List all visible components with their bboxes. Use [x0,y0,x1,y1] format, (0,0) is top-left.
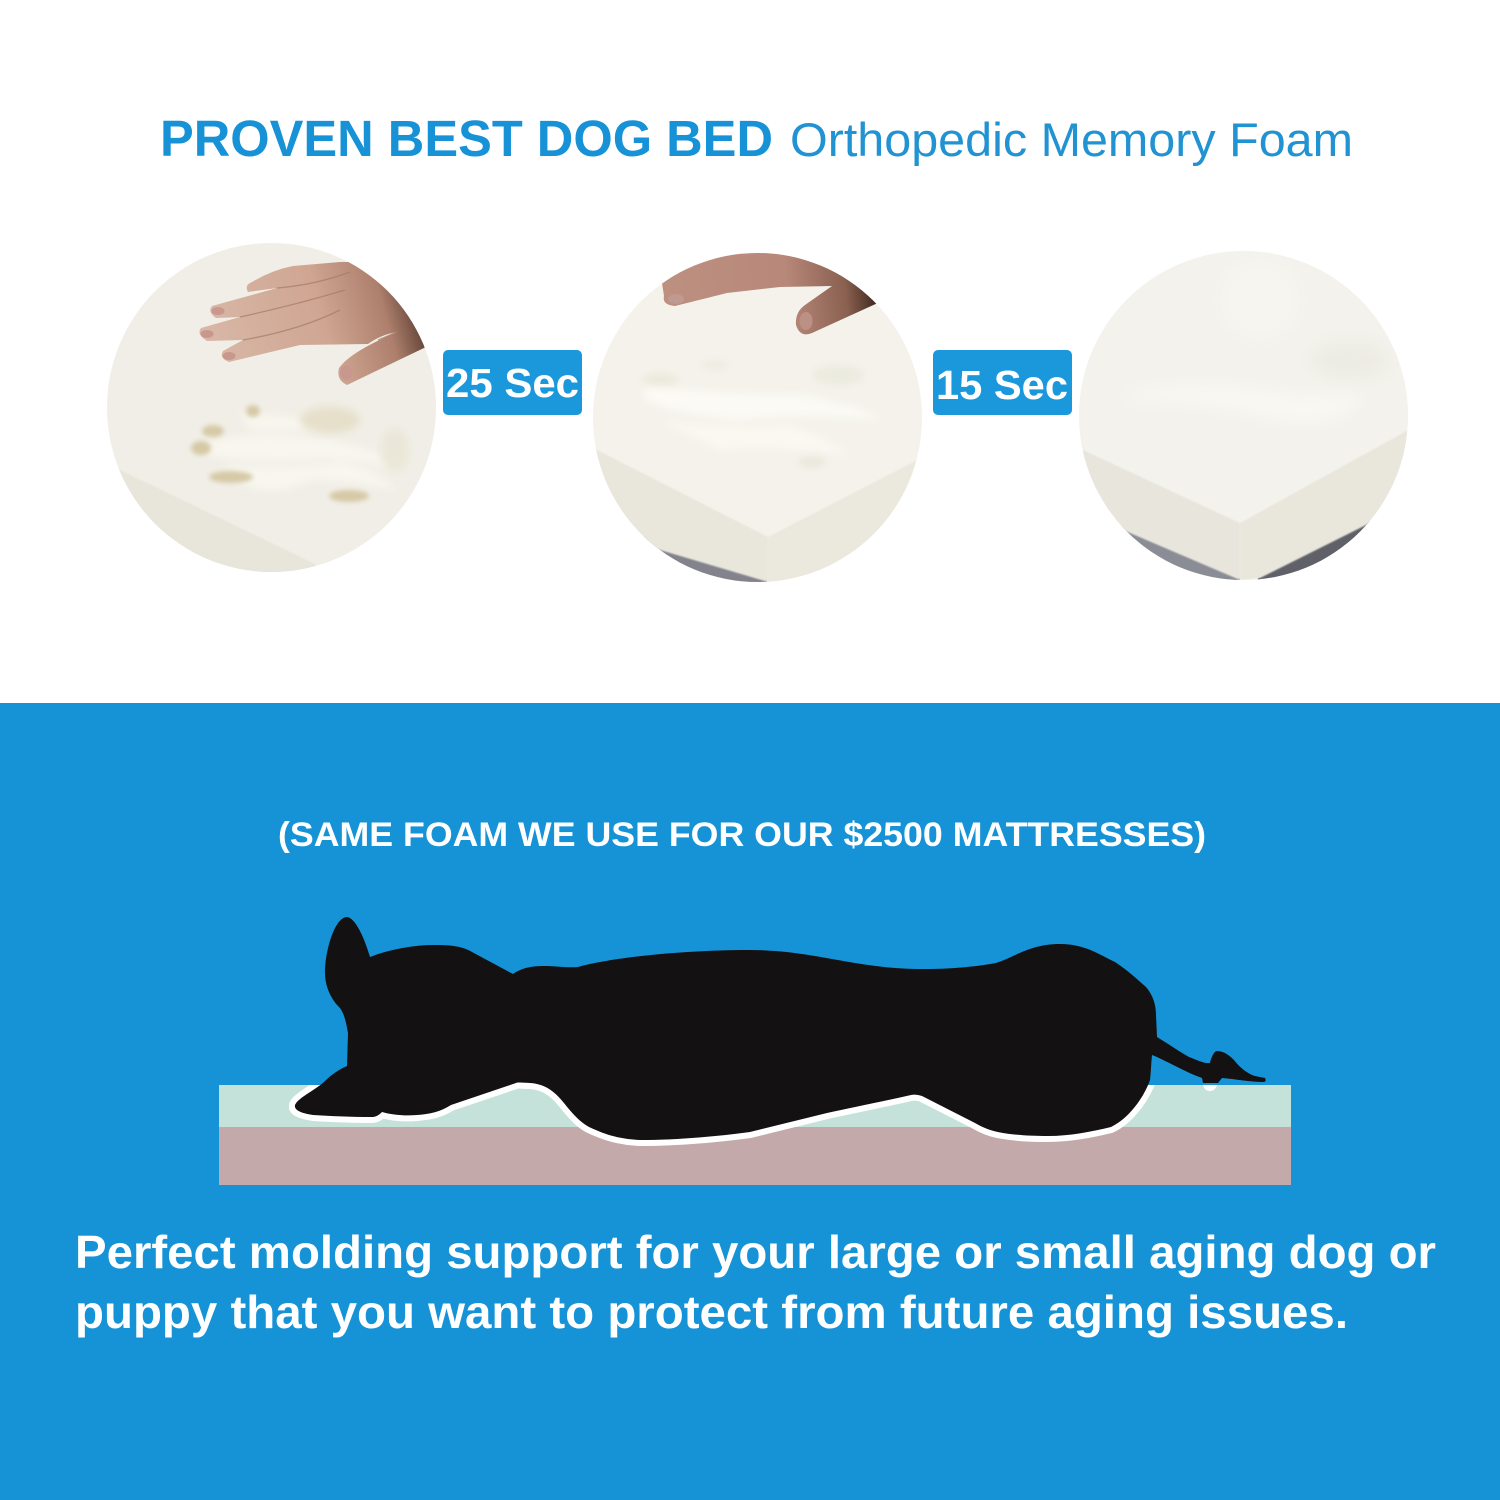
badge: 15 Sec: 15 Sec [936,362,1068,408]
body text: puppy that you want to protect from future aging issues. [75,1286,1348,1338]
foam left side face [1075,445,1240,580]
imprint shadows [300,407,360,433]
imprint soft marks [646,367,860,467]
imprint highlights [205,412,400,491]
gray base under foam [644,536,767,582]
foam side face [119,470,315,572]
background: white top section [0,0,1500,703]
foam photo: hand lifting, deep imprint [107,243,436,572]
foam right side face [768,461,916,582]
badge: 15 Sec [933,350,1072,415]
mattress diagram: foam layers [219,1085,1291,1185]
body text [75,1226,1436,1338]
foam photo: hand leaving, fading imprint [590,245,925,590]
faint imprint [1125,260,1390,422]
title: Orthopedic Memory Foam [790,113,1353,166]
subheading: (SAME FOAM WE USE FOR OUR $2500 MATTRESSES) [278,816,1206,854]
foam right side face [1240,428,1412,580]
icon: hand [200,262,425,385]
icon: hand, fingertip and thumb [662,253,876,334]
badge: 25 Sec: 25 Sec [446,360,579,406]
gray base under foam [1121,526,1240,580]
foam left side face [590,445,768,582]
body text: Perfect molding support for your large or small aging dog or [75,1226,1436,1278]
icon: dog silhouette [295,917,1266,1140]
white contour where foam moulds to dog [288,1082,1217,1146]
title: PROVEN BEST DOG BED [160,110,773,167]
badge: 25 Sec [443,350,582,415]
title [160,110,1353,167]
foam photo: recovered foam [1075,248,1412,590]
